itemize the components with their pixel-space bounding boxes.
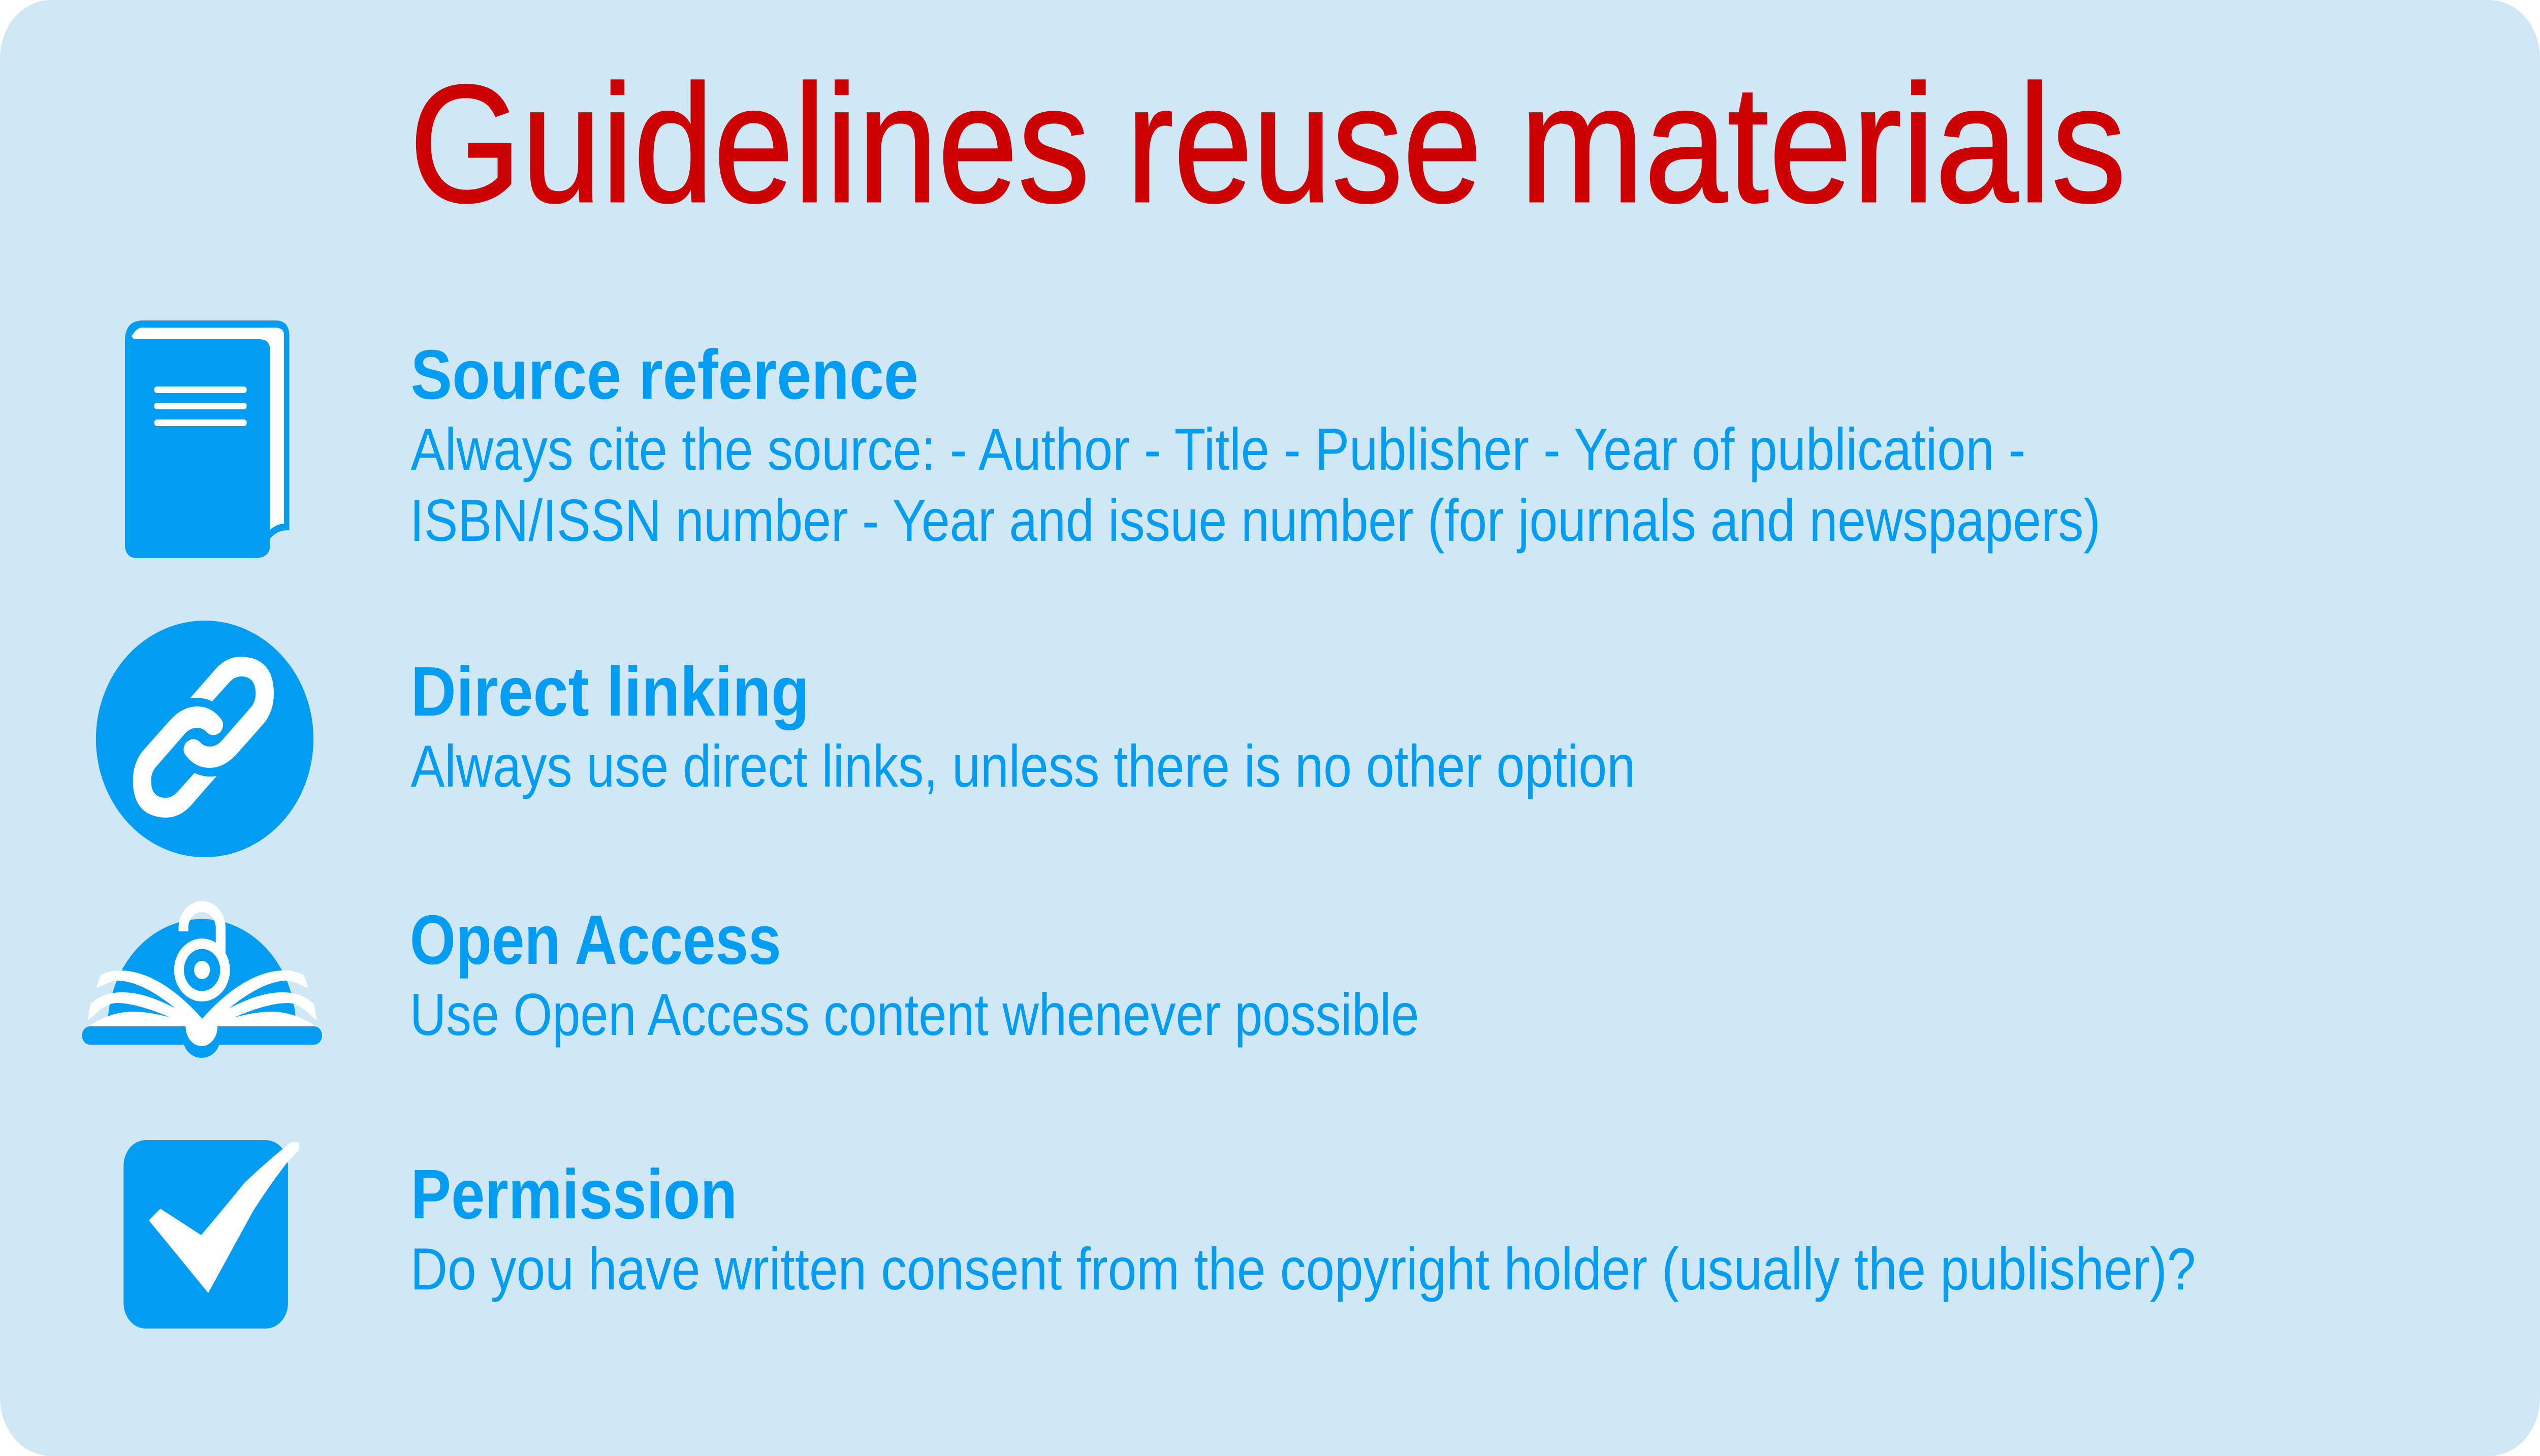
title: reuse (1126, 50, 1482, 237)
icon: open access book (82, 901, 322, 1058)
row: open access (82, 901, 1419, 1058)
text: direct linking details: Always use direct links, unless there is no other option (410, 734, 1635, 800)
text: source reference details (410, 417, 2101, 554)
row: direct linking (96, 621, 1635, 857)
text: source reference details: ISBN/ISSN number - Year and issue number (for journals and newspapers) (410, 488, 2101, 554)
title: materials (1519, 50, 2126, 237)
text: permission details: Do you have written consent from the copyright holder (usually the publisher)? (410, 1237, 2196, 1303)
heading: direct linking: Direct linking (410, 653, 809, 731)
text: source reference details: Always cite the source: - Author - Title - Publisher - Year of publication - (410, 417, 2025, 483)
title: Guidelines (409, 50, 1090, 237)
heading: source reference: Source reference (410, 336, 918, 414)
icon: chain link (96, 621, 313, 857)
heading: open access: Open Access (410, 901, 781, 979)
row: source reference (125, 320, 2101, 558)
text: open access details: Use Open Access content whenever possible (410, 982, 1419, 1048)
icon: checkbox (123, 1140, 299, 1329)
row: permission (123, 1140, 2196, 1329)
icon: book (125, 320, 290, 558)
heading: permission: Permission (410, 1155, 737, 1234)
title (409, 50, 2126, 237)
